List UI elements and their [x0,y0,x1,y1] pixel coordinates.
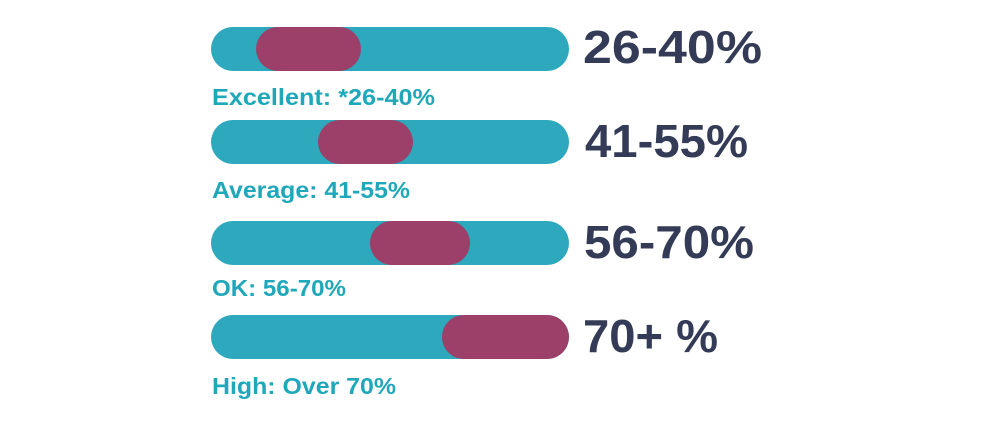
value: 26-40%: 26-40% [583,21,762,73]
track bar: excellent [211,27,569,71]
label: average: Average: 41-55% [212,177,410,203]
range marker: excellent [256,27,361,71]
value: 41-55%: 41-55% [585,115,748,167]
row: excellent [211,21,762,110]
label: high: High: Over 70% [212,373,396,399]
label: ok: OK: 56-70% [212,275,346,301]
track bar: high [211,315,569,359]
range marker: ok [370,221,470,265]
track bar: average [211,120,569,164]
range marker: average [318,120,413,164]
row: high [211,310,718,399]
row: average [211,115,748,203]
row: ok [211,216,754,301]
range marker: high [442,315,569,359]
value: 70+ %: 70+ % [583,310,718,362]
label: excellent: Excellent: *26-40% [212,84,435,110]
track bar: ok [211,221,569,265]
value: 56-70%: 56-70% [584,216,754,268]
